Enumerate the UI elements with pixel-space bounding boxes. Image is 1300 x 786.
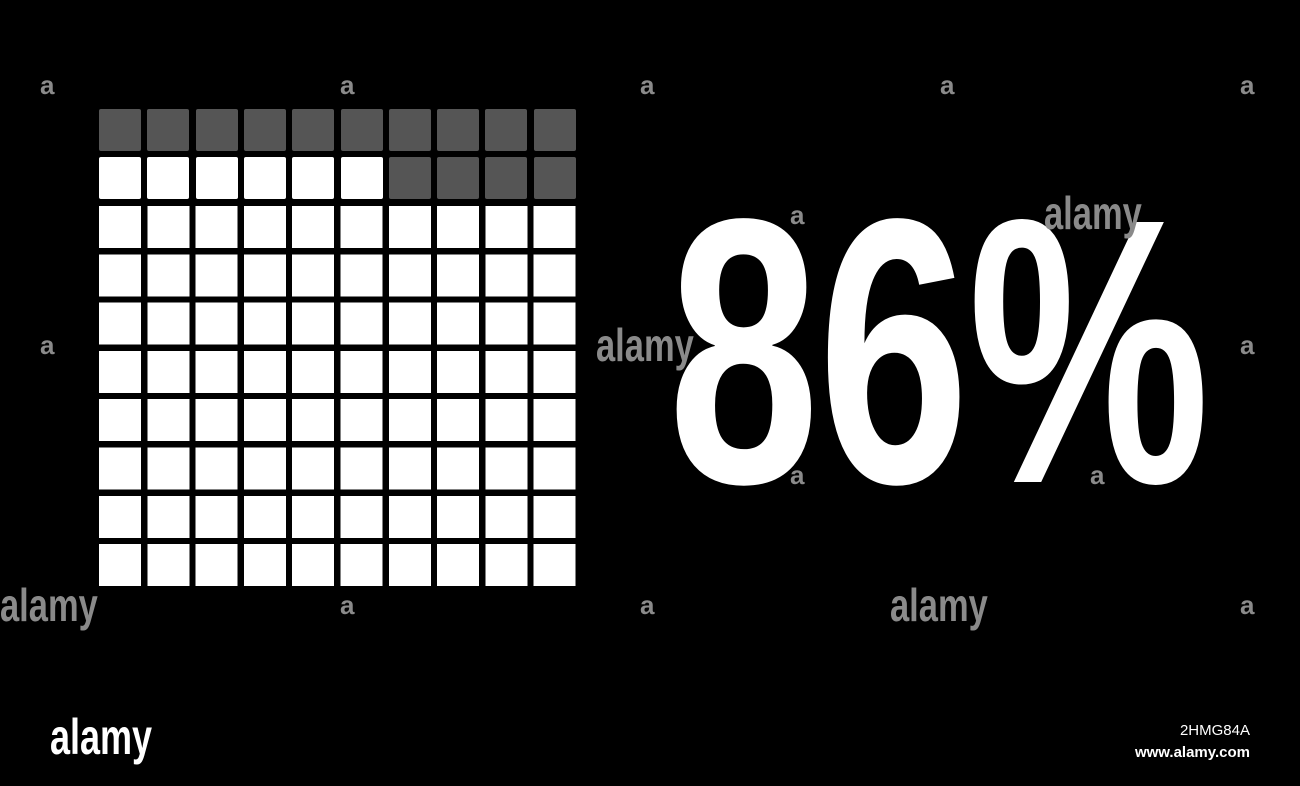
watermarks: alamy bbox=[890, 579, 988, 631]
watermarks: a bbox=[1240, 330, 1254, 360]
percentage value: 86% bbox=[668, 141, 1208, 563]
watermarks: a bbox=[640, 590, 654, 620]
watermarks: a bbox=[40, 330, 54, 360]
logo: alamy bbox=[50, 709, 152, 765]
image id: 2HMG84A bbox=[1180, 722, 1250, 739]
watermarks: a bbox=[940, 70, 954, 100]
watermarks: a bbox=[790, 460, 804, 490]
image id: www.alamy.com bbox=[1135, 744, 1250, 761]
image id bbox=[1135, 722, 1250, 761]
watermarks: a bbox=[40, 70, 54, 100]
watermarks: alamy bbox=[596, 319, 694, 371]
watermarks: a bbox=[1240, 590, 1254, 620]
watermarks: a bbox=[340, 70, 354, 100]
watermarks: a bbox=[340, 590, 354, 620]
watermarks: a bbox=[790, 200, 804, 230]
watermarks: alamy bbox=[1044, 187, 1142, 239]
watermarks: a bbox=[1090, 460, 1104, 490]
watermarks: alamy bbox=[0, 579, 98, 631]
waffle chart: 86 of 100 squares bbox=[99, 109, 576, 586]
watermarks: a bbox=[640, 70, 654, 100]
watermarks: a bbox=[1240, 70, 1254, 100]
